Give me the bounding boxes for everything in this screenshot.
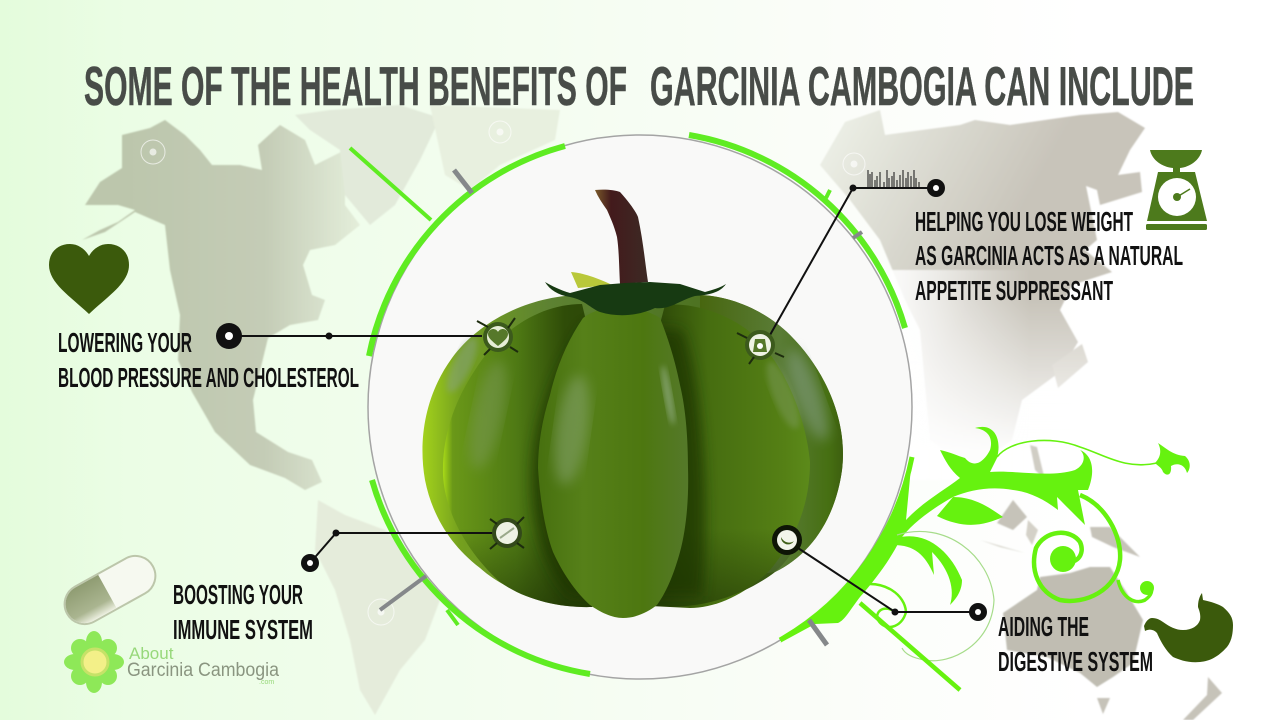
north america (82, 120, 360, 490)
label: boosting immune (173, 579, 313, 645)
eurasia (820, 110, 1145, 470)
green ring segments (369, 135, 912, 674)
icon: large heart (49, 244, 129, 314)
label: helping lose weight: APPETITE SUPPRESSANT (915, 275, 1113, 306)
title: SOME OF THE HEALTH BENEFITS OF (84, 55, 627, 117)
fruit: garcinia cambogia (422, 190, 843, 618)
marker (737, 330, 784, 364)
marker (477, 318, 518, 355)
far right lobe (700, 295, 843, 580)
connector (310, 533, 495, 563)
stem (595, 190, 648, 284)
icon: capsule (57, 549, 163, 631)
south america (315, 500, 440, 715)
lower body shading (443, 400, 810, 607)
centre lobe shadow (532, 325, 705, 596)
calyx (571, 272, 612, 288)
logo flower (64, 631, 124, 693)
logo: .com (259, 679, 274, 686)
label: aiding digestive: DIGESTIVE SYSTEM (998, 646, 1153, 677)
world map (82, 105, 1222, 720)
icon: stomach (1144, 593, 1233, 662)
logo text: About (129, 644, 174, 663)
waveform (868, 170, 919, 187)
logo: Garcinia Cambogia (127, 660, 279, 681)
oceania (1003, 567, 1143, 687)
logo (64, 631, 279, 693)
connector (229, 335, 482, 337)
floral swirl (780, 427, 1190, 690)
left lobe (443, 304, 605, 607)
label: aiding digestive: AIDING THE (998, 611, 1089, 642)
label: lowering blood pressure: BLOOD PRESSURE AND CHOLESTEROL (58, 362, 359, 393)
label: lowering blood pressure (58, 327, 359, 393)
callout: digestive (772, 525, 1233, 677)
callout: heart (49, 244, 518, 393)
icon: scale (1146, 150, 1207, 230)
ring ticks (350, 148, 862, 645)
label: lowering blood pressure: LOWERING YOUR (58, 327, 192, 358)
connector (798, 548, 978, 612)
far lobes base (422, 295, 843, 607)
connector (770, 188, 936, 335)
label: boosting immune: IMMUNE SYSTEM (173, 614, 313, 645)
central circle (350, 135, 912, 679)
label: aiding digestive (998, 611, 1153, 677)
callout: weight (737, 150, 1207, 364)
right lobe (640, 304, 810, 608)
label: helping lose weight (915, 206, 1183, 306)
marker (490, 517, 524, 549)
callout: immune (57, 517, 524, 645)
marker (772, 525, 802, 555)
label: boosting immune: BOOSTING YOUR (173, 579, 303, 610)
centre lobe (538, 308, 688, 618)
decorative crosshair dots on map (141, 121, 865, 625)
